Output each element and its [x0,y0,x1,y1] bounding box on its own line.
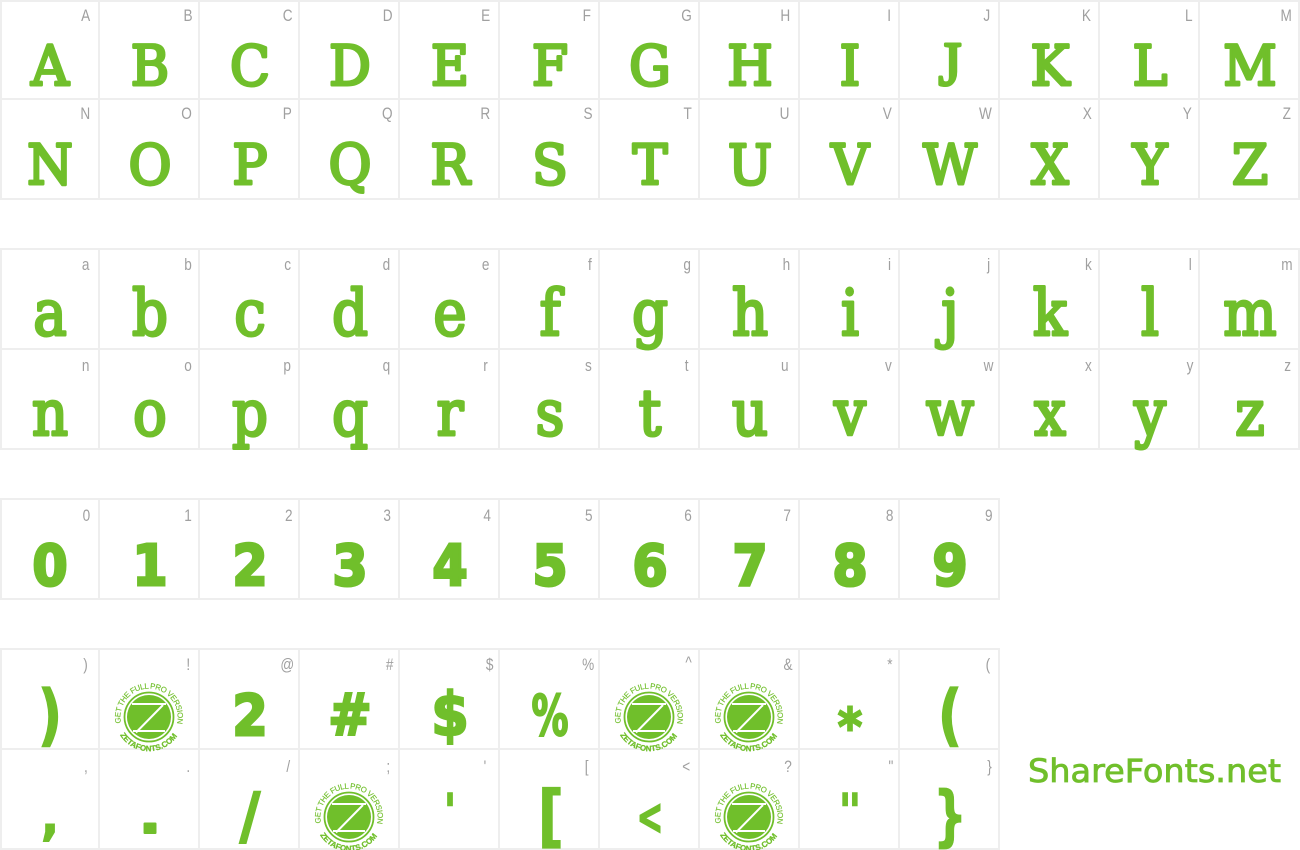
glyph left parenthesis: ( [938,677,962,755]
glyph y: y [1133,377,1166,451]
glyph G: G [681,7,692,25]
glyph 0: 0 [32,533,68,599]
glyph k: k [1033,277,1068,351]
glyph L: L [1185,7,1193,25]
glyph W: W [979,105,992,123]
glyph at sign: @ [280,656,294,674]
glyph d [332,256,390,351]
glyph g: g [683,256,691,274]
glyph p: p [283,357,291,375]
glyph D [329,7,393,98]
zetafonts badge: semicolon: ; [386,758,390,776]
glyph h: h [732,277,768,351]
glyph g: g [632,277,668,351]
glyph b: b [184,256,192,274]
glyph 9 [932,507,993,599]
glyph l: l [1141,277,1159,351]
glyph T: T [633,133,668,197]
zetafonts badge: question mark: ? [784,758,792,776]
glyph p: p [232,377,268,451]
glyph I: I [887,7,891,25]
glyph apostrophe: ' [484,758,486,776]
glyph x [1034,357,1092,451]
zetafonts badge: exclamation: ! [186,656,190,674]
glyph right brace [933,758,992,850]
glyph I: I [840,34,860,98]
glyph A: A [30,34,70,98]
glyph Y: Y [1132,133,1168,197]
ShareFonts.net wordmark: ShareFonts.net [1028,752,1281,790]
glyph right parenthesis: ) [38,677,62,755]
glyph 3 [332,507,391,599]
glyph y [1133,357,1194,451]
glyph p [232,357,291,451]
glyph h: h [783,256,790,274]
glyph X [1031,105,1092,197]
glyph 0 [32,507,90,599]
glyph 9: 9 [932,533,968,599]
glyph 2: 2 [232,533,268,599]
glyph F: F [532,34,568,98]
glyph less than: < [637,788,663,846]
glyph G [629,7,692,98]
glyph comma: , [41,789,59,847]
glyph L: L [1133,34,1167,98]
glyph V: V [830,133,870,197]
glyph w: w [926,377,974,451]
glyph at sign [232,656,294,749]
zetafonts badge: question mark: GET THE FULL PRO VERSION [714,783,784,824]
glyph E: E [481,7,490,25]
glyph c: c [234,277,266,351]
glyph comma [41,758,88,847]
glyph H: H [727,34,773,98]
glyph s [536,357,592,451]
glyph j [936,256,990,351]
glyph B: B [131,34,169,98]
glyph 8: 8 [886,507,893,525]
glyph apostrophe: ' [443,784,457,842]
glyph K: K [1082,7,1092,25]
glyph dollar [431,656,494,750]
glyph I [840,7,891,98]
glyph u [732,357,789,451]
glyph 0: 0 [83,507,90,525]
glyph r [437,357,488,451]
digits row [32,507,993,599]
glyph b [132,256,192,351]
glyph S [532,105,593,197]
zetafonts badge: caret [614,654,692,752]
glyph b: b [132,277,168,351]
glyph 7 [732,507,791,599]
glyph t: t [639,377,661,451]
glyph c [234,256,291,351]
glyph A [30,7,91,98]
glyph 7: 7 [732,533,768,599]
glyph 5: 5 [585,507,593,525]
glyph right brace: } [987,758,992,776]
glyph R: R [480,105,490,123]
glyph T: T [683,105,692,123]
glyph S: S [584,105,593,123]
glyph G: G [629,34,671,98]
glyph asterisk [838,656,893,758]
glyph Y: Y [1183,105,1192,123]
glyph P [232,105,292,197]
glyph hash [328,656,394,750]
glyph U [728,105,789,197]
glyph z: z [1235,377,1265,451]
glyph dollar: $ [431,680,469,750]
glyph D: D [329,34,371,98]
glyph slash: / [240,779,261,850]
zetafonts badge: caret: ^ [685,654,692,672]
glyph less than: < [682,758,690,776]
glyph n [32,357,89,451]
symbols row 1 [38,654,991,758]
glyph t [639,357,689,451]
glyph H: H [780,7,790,25]
glyph at sign: 2 [232,683,268,749]
glyph n: n [82,357,89,375]
zetafonts badge: semicolon: GET THE FULL PRO VERSION [314,783,384,824]
glyph percent: % [531,684,569,749]
glyph F [532,7,591,98]
glyph x: x [1085,357,1092,375]
glyph 1: 1 [132,533,168,599]
glyph B: B [184,7,193,25]
glyph i [841,256,891,351]
glyph m [1223,256,1293,351]
glyph 3: 3 [383,507,391,525]
glyph 4: 4 [483,507,491,525]
glyph a: a [33,277,67,351]
glyph 6: 6 [684,507,692,525]
glyph slash [240,758,291,850]
glyph v: v [885,357,892,375]
glyph x: x [1034,377,1066,451]
glyph r: r [483,357,488,375]
glyph C: C [283,7,293,25]
glyph 2: 2 [285,507,293,525]
glyph J [939,7,990,99]
glyph percent: % [582,656,594,674]
glyph J: J [983,7,990,25]
glyph N [27,105,90,197]
zetafonts badge: exclamation: GET THE FULL PRO VERSION [114,683,184,724]
glyph V: V [883,105,892,123]
glyph T [633,105,692,197]
glyph c: c [284,256,291,274]
glyph X: X [1031,133,1069,197]
glyph right parenthesis: ) [83,656,88,674]
glyph double quote: " [889,758,893,776]
glyph Q [329,105,393,197]
glyph O [129,105,192,197]
glyph W: W [923,133,977,197]
glyph K: K [1030,34,1070,98]
glyph z [1235,357,1291,451]
glyph r: r [437,377,464,451]
glyph e: e [433,277,467,351]
glyph E: E [431,34,469,98]
glyph F: F [583,7,591,25]
glyph f: f [588,256,592,274]
glyph 8 [832,507,893,599]
zetafonts badge: caret: GET THE FULL PRO VERSION [614,683,684,724]
glyph L [1133,7,1193,98]
glyph 9: 9 [985,507,993,525]
glyph k [1033,256,1092,351]
glyph J: J [939,31,961,99]
glyph m: m [1281,256,1293,274]
glyph slash: / [286,758,291,776]
glyph Y [1132,105,1192,197]
glyph hash: # [328,682,372,750]
glyph q: q [332,377,368,451]
glyph u: u [781,357,789,375]
glyph f [540,256,592,351]
glyph X: X [1083,105,1092,123]
zetafonts badge: ampersand: & [784,656,793,674]
uppercase row A-M [30,7,1292,99]
glyph y: y [1187,357,1194,375]
glyph 6 [632,507,692,599]
glyph C [230,7,293,98]
glyph s: s [585,357,592,375]
glyph A: A [81,7,91,25]
glyph asterisk: * [838,697,862,758]
glyph Z: Z [1232,133,1268,197]
zetafonts badge: exclamation: ZETAFONTS.COM [120,732,178,752]
glyph w [926,357,994,451]
glyph 3: 3 [332,533,368,599]
glyph R: R [430,133,471,197]
glyph left bracket: [ [585,758,589,776]
glyph less than [637,758,690,846]
glyph W [923,105,992,197]
glyph w: w [983,357,994,375]
glyph period: . [139,788,161,846]
glyph 8: 8 [832,533,868,599]
glyph q [332,357,390,451]
glyph double quote: " [838,784,862,842]
glyph M [1223,7,1292,98]
zetafonts badge: ampersand [714,656,793,752]
glyph P: P [232,133,268,197]
glyph h [732,256,790,351]
glyph V [830,105,892,197]
glyph i: i [888,256,891,274]
glyph dollar: $ [486,656,494,674]
symbols row 2 [41,758,992,850]
glyph asterisk: * [887,656,893,674]
glyph double quote [838,758,893,842]
glyph N: N [27,133,73,197]
glyph N: N [80,105,90,123]
glyph q: q [383,357,390,375]
glyph Q: Q [329,133,371,197]
glyph j: j [936,277,959,351]
glyph k: k [1085,256,1092,274]
glyph o: o [133,377,167,451]
glyph m: m [1223,277,1277,351]
glyph 2 [232,507,293,599]
glyph P: P [283,105,292,123]
zetafonts badge: semicolon [314,758,390,850]
glyph apostrophe [443,758,486,842]
glyph a: a [82,256,90,274]
glyph o [133,357,192,451]
glyph hash: # [386,656,394,674]
glyph a [33,256,90,351]
zetafonts badge: question mark [714,758,792,850]
glyph n: n [32,377,68,451]
glyph O: O [129,133,171,197]
glyph Z: Z [1283,105,1291,123]
glyph f: f [540,277,564,351]
glyph D: D [383,7,393,25]
glyph 7: 7 [783,507,791,525]
glyph M: M [1280,7,1292,25]
glyph v [833,357,892,451]
glyph z: z [1284,357,1291,375]
glyph U: U [780,105,789,123]
lowercase row a-m [33,256,1293,351]
glyph left bracket [538,758,589,850]
glyph j: j [986,256,990,274]
zetafonts badge: caret: ZETAFONTS.COM [620,732,678,752]
glyph left parenthesis [938,656,991,755]
glyph C: C [230,34,270,98]
glyph 5: 5 [532,533,568,599]
glyph 4: 4 [432,533,468,599]
glyph l: l [1189,256,1192,274]
glyph d: d [332,277,368,351]
glyph 5 [532,507,593,599]
glyph 1 [132,507,192,599]
glyph v: v [833,377,866,451]
glyph d: d [383,256,390,274]
zetafonts badge: ampersand: GET THE FULL PRO VERSION [714,683,784,724]
glyph percent [531,656,594,749]
glyph l [1141,256,1192,351]
glyph O: O [181,105,192,123]
glyph M: M [1223,34,1277,98]
uppercase row N-Z [27,105,1291,197]
glyph period [139,758,190,846]
glyph K [1030,7,1092,98]
glyph left parenthesis: ( [986,656,991,674]
glyph Z [1232,105,1291,197]
glyph t: t [685,357,689,375]
glyph period: . [186,758,190,776]
lowercase row n-z [32,357,1291,451]
glyph H [727,7,790,98]
glyph right parenthesis [38,656,88,755]
glyph 4 [432,507,491,599]
glyph 1: 1 [184,507,192,525]
glyph i: i [841,277,859,351]
glyph 6: 6 [632,533,668,599]
glyph E [431,7,490,98]
zetafonts badge: ampersand: ZETAFONTS.COM [720,732,778,752]
glyph s: s [536,377,564,451]
glyph S: S [532,133,568,197]
glyph comma: , [84,758,88,776]
glyph g [632,256,691,351]
glyph Q: Q [382,105,393,123]
glyph B [131,7,193,98]
glyph e: e [482,256,489,274]
glyph R [430,105,490,197]
zetafonts badge: exclamation [114,656,190,752]
glyph u: u [732,377,768,451]
glyph o: o [184,357,192,375]
glyph e [433,256,489,351]
glyph U: U [728,133,772,197]
